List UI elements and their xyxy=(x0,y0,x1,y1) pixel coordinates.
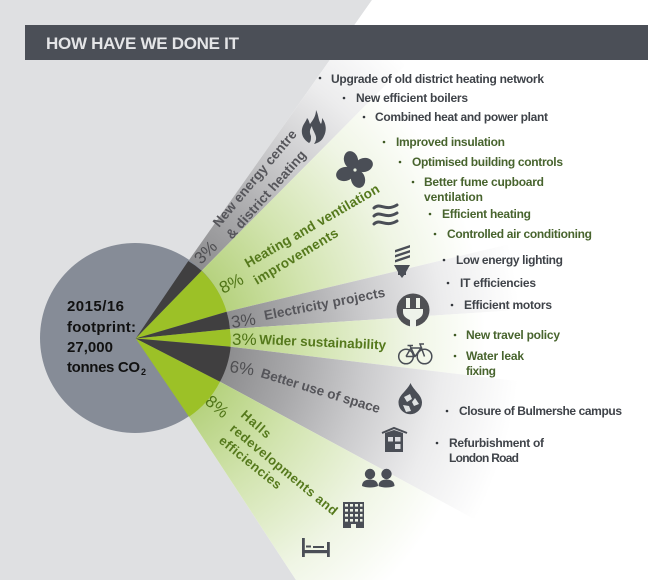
header bar xyxy=(25,25,648,60)
list: space actions: London Road xyxy=(449,451,519,465)
pie sectors xyxy=(136,261,231,417)
grey background xyxy=(0,0,372,580)
footprint label xyxy=(67,298,146,377)
list: sustainability actions: Water leak xyxy=(466,349,524,363)
icon: flame xyxy=(302,110,326,144)
icon: bed xyxy=(302,538,330,557)
segment: halls redevelopments xyxy=(201,392,341,518)
footprint circle xyxy=(40,243,230,433)
segment: electricity projects: 3% xyxy=(230,310,257,332)
list: electricity actions xyxy=(443,253,563,312)
footprint label: tonnes CO xyxy=(67,359,140,376)
segment: wider sustainability: Wider sustainability xyxy=(259,332,387,353)
list: sustainability actions xyxy=(454,328,560,378)
icon: air waves xyxy=(374,205,397,224)
segment: halls redevelopments: 8% xyxy=(201,392,232,422)
segment: new energy centre xyxy=(190,126,309,268)
list: sustainability actions: fixing xyxy=(466,364,496,378)
list: energy centre actions: Combined heat and power plant xyxy=(375,110,548,124)
list: heating and ventilation actions: Controlled air conditioning xyxy=(447,227,592,241)
list: electricity actions: Low energy lighting xyxy=(456,253,563,267)
segment: heating and ventilation: 8% xyxy=(216,269,247,298)
list: heating and ventilation actions: Efficient heating xyxy=(442,207,531,221)
list: heating and ventilation actions: Optimised building controls xyxy=(412,155,563,169)
list: energy centre actions: Upgrade of old district heating network xyxy=(331,72,544,86)
segment: heating and ventilation: Heating and ventilation xyxy=(242,181,382,271)
icon: house xyxy=(382,428,407,452)
icon: fan xyxy=(334,149,375,190)
icon: plug xyxy=(396,294,430,327)
segment: halls redevelopments: Halls xyxy=(238,407,274,441)
segment: heating and ventilation: improvements xyxy=(251,225,341,288)
footprint label: footprint: xyxy=(67,319,136,336)
icon: people xyxy=(362,469,394,488)
list: heating and ventilation actions: Improved insulation xyxy=(396,135,505,149)
segment: new energy centre: New energy centre xyxy=(210,126,300,230)
title: HOW HAVE WE DONE IT xyxy=(46,34,240,53)
segment: halls redevelopments: efficiencies xyxy=(216,433,285,492)
segment: heating and ventilation xyxy=(216,181,382,298)
list: energy centre actions xyxy=(319,72,548,124)
list: electricity actions: IT efficiencies xyxy=(460,276,536,290)
icon: bicycle xyxy=(399,344,432,364)
segment: new energy centre: 3% xyxy=(190,237,221,268)
list: space actions xyxy=(436,404,622,465)
list: heating and ventilation actions xyxy=(383,135,592,241)
list: heating and ventilation actions: Better fume cupboard xyxy=(424,175,544,189)
segment: electricity projects xyxy=(230,285,386,332)
footprint label: 2 xyxy=(141,367,146,377)
list: electricity actions: Efficient motors xyxy=(464,298,552,312)
footprint label: 27,000 xyxy=(67,339,113,356)
segment: better use of space xyxy=(228,357,383,416)
segment: better use of space: 6% xyxy=(228,357,255,379)
segment: better use of space: Better use of space xyxy=(259,366,383,416)
segment: electricity projects: Electricity projects xyxy=(263,285,386,323)
icon: light bulb xyxy=(394,245,410,278)
list: space actions: Refurbishment of xyxy=(449,436,545,450)
list: space actions: Closure of Bulmershe campus xyxy=(459,404,622,418)
footprint label: 2015/16 xyxy=(67,298,124,315)
list: sustainability actions: New travel policy xyxy=(466,328,560,342)
segment: halls redevelopments: redevelopments and xyxy=(227,421,341,518)
icon: water drop with recycling xyxy=(398,383,422,414)
segment: new energy centre: & district heating xyxy=(223,147,309,242)
list: energy centre actions: New efficient boilers xyxy=(356,91,468,105)
rays: fading wedges xyxy=(188,0,648,580)
list: heating and ventilation actions: ventilation xyxy=(424,190,483,204)
icon: building xyxy=(343,502,364,528)
segment: wider sustainability: 3% xyxy=(232,330,257,349)
